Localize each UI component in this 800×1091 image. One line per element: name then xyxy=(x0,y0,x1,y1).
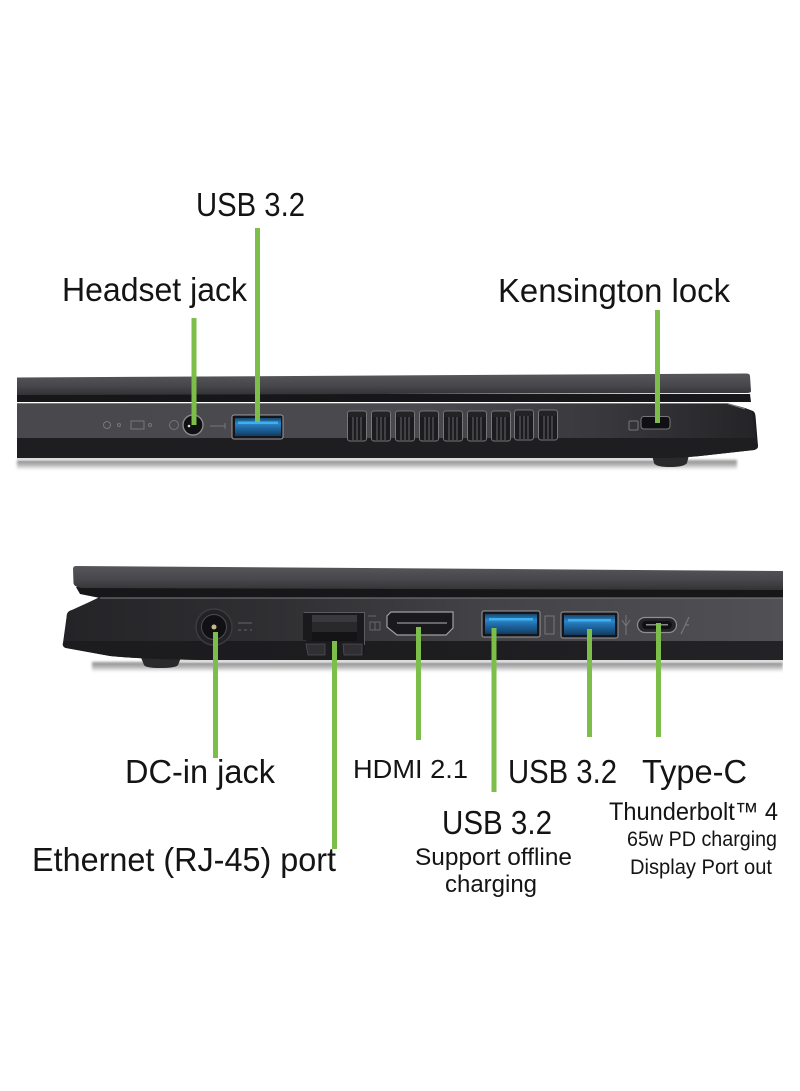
label: Kensington lock: Kensington lock xyxy=(498,272,730,309)
network icon xyxy=(368,616,380,630)
HDMI port xyxy=(387,612,453,635)
rubber foot xyxy=(652,455,689,467)
USB symbol xyxy=(622,615,630,635)
body xyxy=(63,597,783,660)
Ethernet port xyxy=(303,612,365,655)
side panel xyxy=(17,404,756,438)
lid xyxy=(73,566,783,590)
label: USB 3.2 offline charging xyxy=(415,804,572,898)
side panel xyxy=(64,598,783,641)
lid xyxy=(17,374,751,395)
hinge seam xyxy=(76,587,783,598)
label: Thunderbolt details: Display Port out xyxy=(630,856,772,879)
Type-C port xyxy=(638,618,676,632)
USB port xyxy=(232,415,283,439)
body xyxy=(17,403,758,458)
label: Thunderbolt details: Thunderbolt™ 4 xyxy=(609,798,778,826)
label: USB 3.2 offline charging: charging xyxy=(445,871,537,898)
DC-in jack xyxy=(196,609,252,645)
lower edge shade xyxy=(63,641,783,660)
status icons xyxy=(104,420,638,430)
lower edge shade xyxy=(17,438,758,458)
callout lines: bottom laptop xyxy=(213,623,661,849)
vents xyxy=(348,410,558,441)
Kensington slot xyxy=(641,416,670,429)
label: USB 3.2 right: USB 3.2 xyxy=(508,753,617,790)
offline charging icon xyxy=(545,616,554,634)
label: Type-C: Type-C xyxy=(642,753,747,790)
desk shadow xyxy=(92,662,783,672)
label: Headset jack: Headset jack xyxy=(62,271,247,308)
laptop: left-side view xyxy=(63,566,800,675)
callout lines: top laptop xyxy=(192,228,660,425)
laptop: right-side view xyxy=(17,374,758,470)
label: USB 3.2 offline charging: Support offline xyxy=(415,844,572,871)
USB port 1 xyxy=(482,611,540,637)
label: USB 3.2 offline charging: USB 3.2 xyxy=(442,804,552,841)
rubber foot xyxy=(140,655,182,668)
label: Ethernet port: Ethernet (RJ-45) port xyxy=(32,841,336,878)
label: Thunderbolt details xyxy=(609,798,778,879)
hinge seam xyxy=(17,394,751,402)
label: Thunderbolt details: 65w PD charging xyxy=(627,828,777,851)
label: HDMI 2.1: HDMI 2.1 xyxy=(353,754,468,784)
USB port 2 xyxy=(561,612,618,638)
label: DC-in jack: DC-in jack xyxy=(125,753,275,790)
headset jack xyxy=(183,415,203,435)
Thunderbolt symbol xyxy=(681,617,689,634)
desk shadow xyxy=(17,460,737,470)
label: USB 3.2 top: USB 3.2 xyxy=(196,186,305,223)
